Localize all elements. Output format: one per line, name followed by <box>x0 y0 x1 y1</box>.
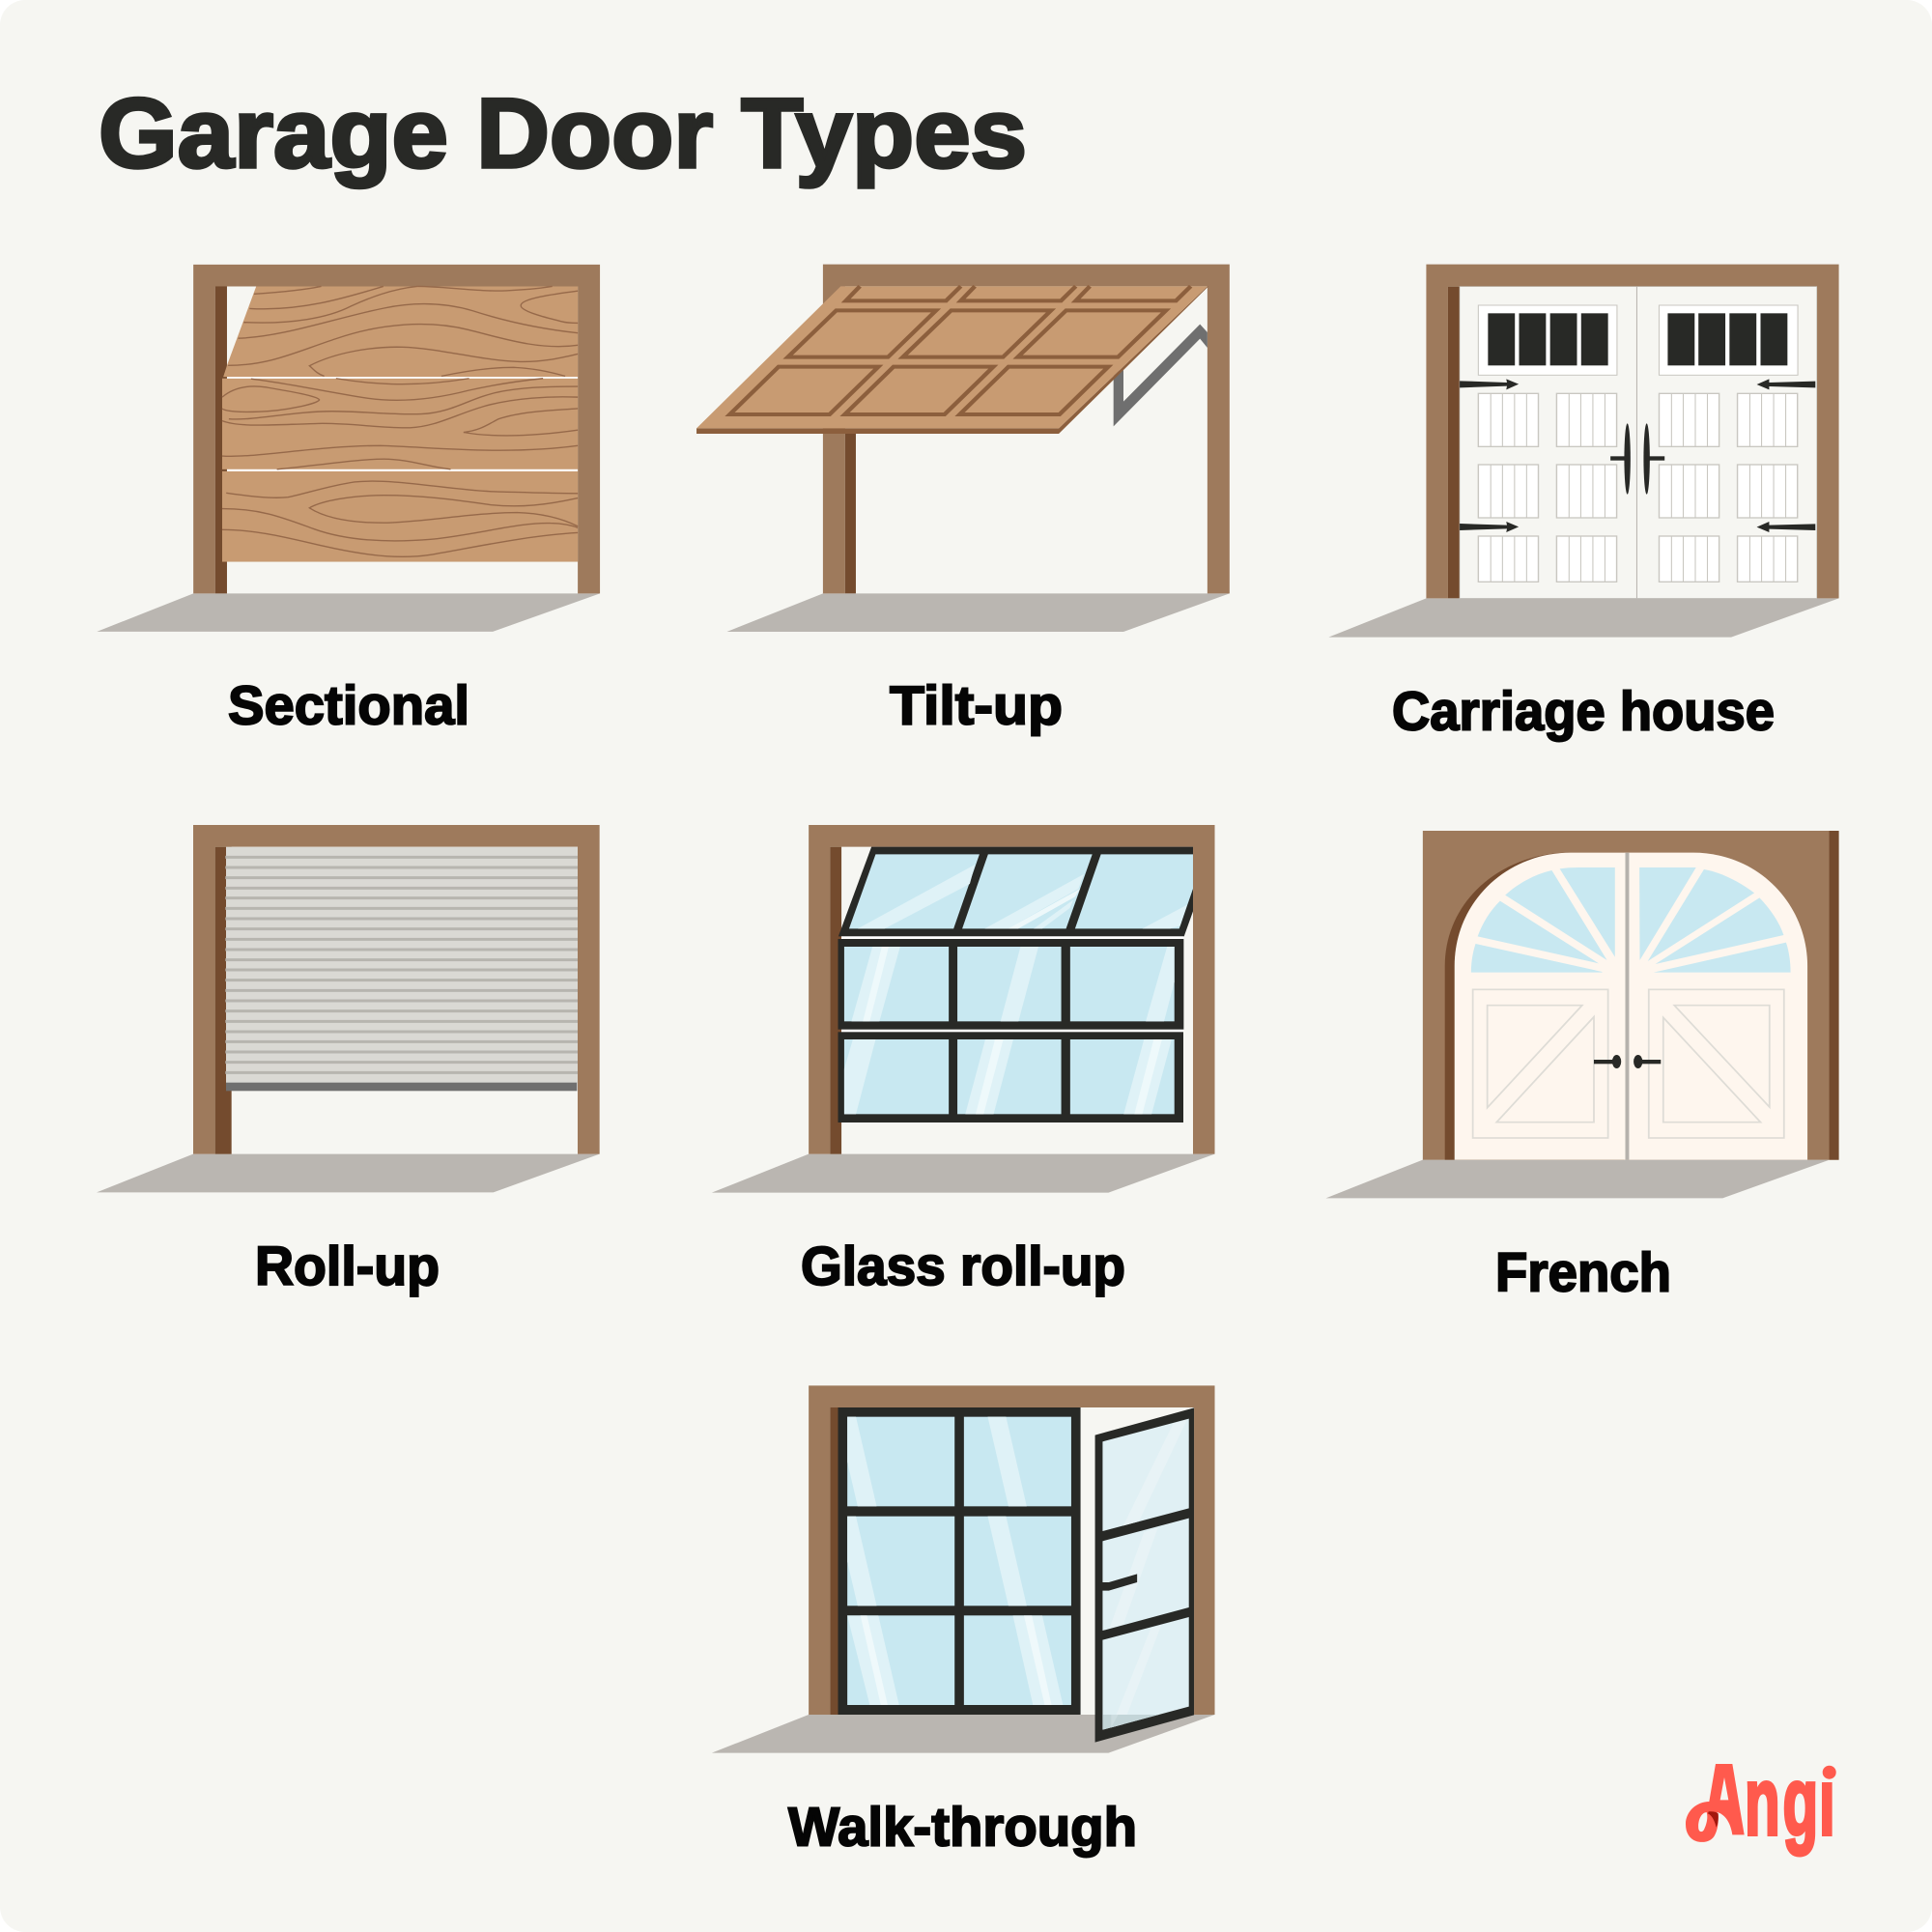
logo: Angi: Angi <box>1700 1747 1835 1856</box>
door illustration: glass roll-up <box>712 825 1214 1193</box>
label: glass roll-up: Glass roll-up <box>801 1236 1125 1297</box>
door illustration: sectional <box>97 265 600 632</box>
label: walk-through: Walk-through <box>788 1797 1137 1859</box>
label: french: French <box>1495 1242 1671 1304</box>
door illustration: walk-through <box>712 1385 1214 1753</box>
title: Garage Door Types <box>99 78 1027 188</box>
door illustration: tilt-up <box>696 265 1230 632</box>
door illustration: roll-up <box>97 825 600 1192</box>
label: tilt-up: Tilt-up <box>890 674 1063 736</box>
door illustration: french <box>1325 831 1839 1198</box>
label: sectional: Sectional <box>228 674 469 736</box>
label: roll-up: Roll-up <box>255 1236 440 1297</box>
door illustration: carriage house <box>1328 265 1839 638</box>
label: carriage house: Carriage house <box>1392 680 1775 742</box>
